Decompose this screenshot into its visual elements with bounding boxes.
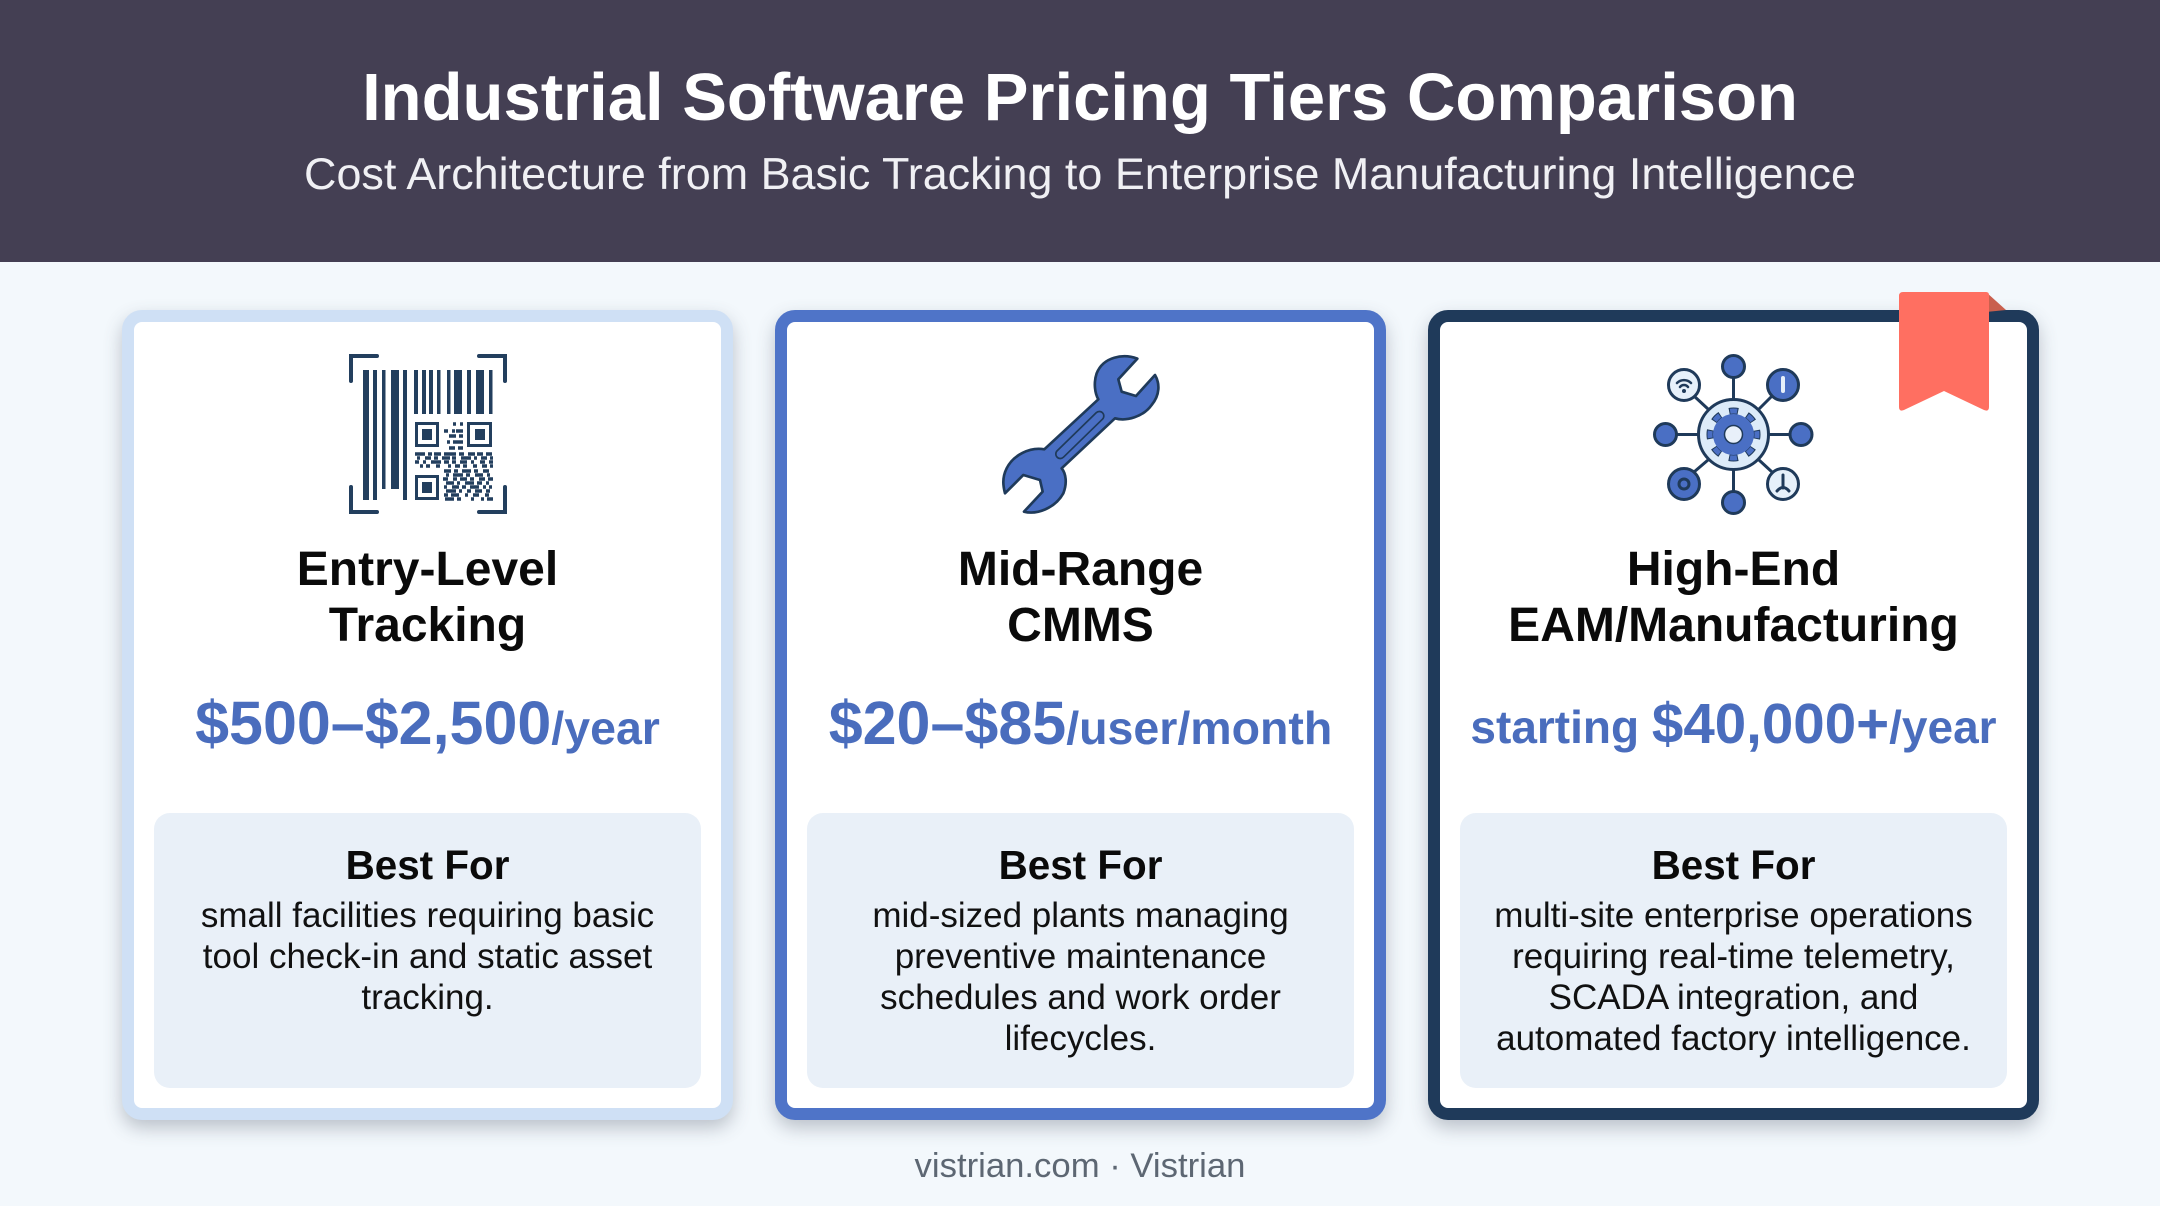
best for panel [154, 813, 701, 1088]
panel: high-end EAM/manufacturing card [1428, 310, 2039, 1120]
heading: Tracking [329, 598, 526, 652]
icon: bookmark ribbon [1899, 292, 2006, 411]
header banner [0, 0, 2160, 262]
best for heading: Best For [1652, 842, 1815, 888]
heading [297, 542, 558, 652]
heading: Mid-Range [958, 542, 1203, 596]
heading: EAM/Manufacturing [1508, 598, 1959, 652]
heading: High-End [1627, 542, 1840, 596]
best for description: mid-sized plants managing [872, 896, 1289, 935]
heading [958, 542, 1203, 652]
best for heading: Best For [346, 842, 509, 888]
best for heading: Best For [999, 842, 1162, 888]
best for description: SCADA integration, and [1549, 978, 1918, 1017]
best for description: tool check-in and static asset [203, 937, 652, 976]
best for description: tracking. [361, 978, 494, 1017]
price: $500–$2,500/year [195, 689, 660, 757]
gear [1710, 411, 1757, 458]
subtitle: Cost Architecture from Basic Tracking to Enterprise Manufacturing Intelligence [304, 148, 1856, 199]
best for description: preventive maintenance [895, 937, 1266, 976]
best for description: small facilities requiring basic [201, 896, 654, 935]
best for description: multi-site enterprise operations [1494, 896, 1973, 935]
heading [1508, 542, 1959, 652]
title: Industrial Software Pricing Tiers Comparison [362, 60, 1798, 135]
price: $20–$85/user/month [829, 689, 1332, 757]
best for panel [807, 813, 1354, 1088]
heading: Entry-Level [297, 542, 558, 596]
footer attribution: vistrian.com · Vistrian [915, 1147, 1245, 1185]
best for description: automated factory intelligence. [1496, 1019, 1971, 1058]
price: starting $40,000+/year [1470, 692, 1997, 755]
panel: mid-range CMMS card [775, 310, 1386, 1120]
best for description: requiring real-time telemetry, [1512, 937, 1955, 976]
best for panel [1460, 813, 2007, 1088]
best for description: schedules and work order [880, 978, 1281, 1017]
best for description: lifecycles. [1005, 1019, 1156, 1058]
panel: entry-level tracking card [122, 310, 733, 1120]
best for description [1494, 896, 1973, 1058]
best for description [201, 896, 654, 1017]
best for description [872, 896, 1289, 1058]
heading: CMMS [1007, 598, 1154, 652]
